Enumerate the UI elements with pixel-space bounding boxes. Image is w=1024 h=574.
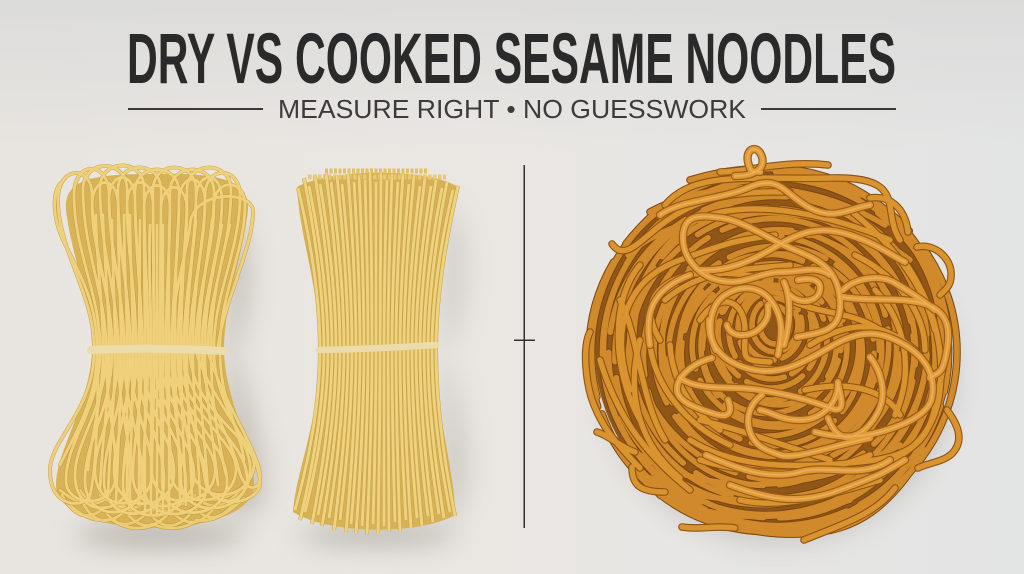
subtitle text: MEASURE RIGHT • NO GUESSWORK (278, 94, 747, 124)
icon: cooked sesame noodle mound (534, 108, 1012, 574)
twine tie (319, 345, 436, 350)
center divider with tick (514, 165, 535, 528)
twine tie (91, 349, 224, 351)
icon: dry noodle bundle with loops (50, 166, 266, 547)
icon: dry straight noodle bundle (293, 171, 467, 546)
